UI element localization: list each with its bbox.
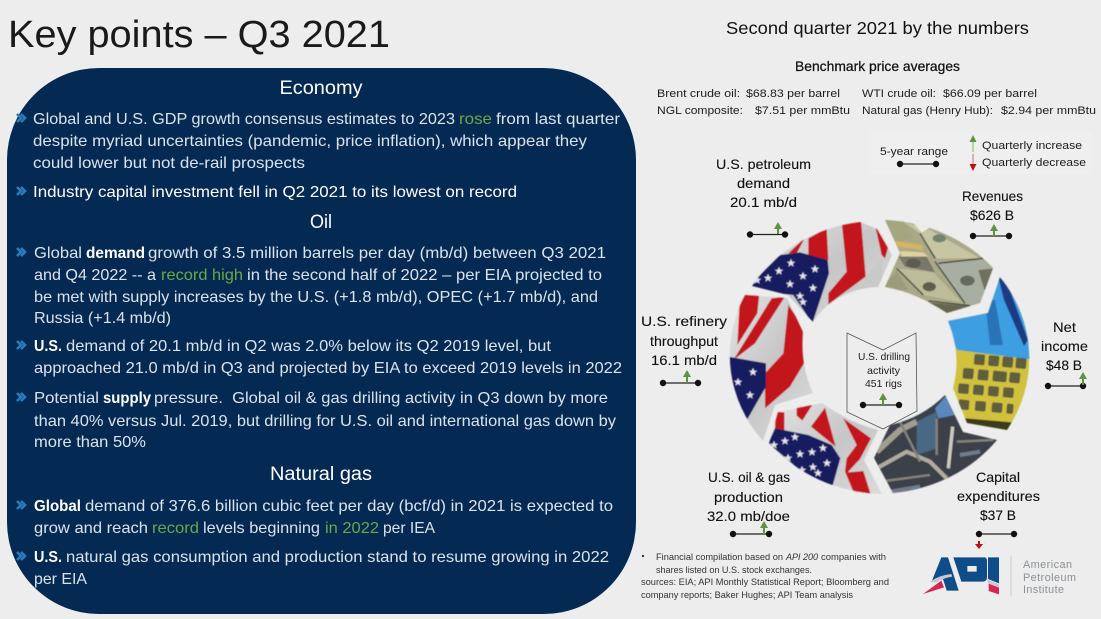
heading: benchmark prices: Benchmark price averages: [795, 59, 960, 74]
label: revenues: Revenues: [962, 189, 1023, 204]
bullet: global demand: Global: [34, 245, 82, 262]
bullet: U.S. natural gas: U.S.: [34, 549, 62, 566]
segment: calculator, net income: [948, 276, 1030, 431]
bullet: global demand: demand: [86, 245, 145, 262]
label: U.S. petroleum demand: demand: [737, 176, 790, 191]
API logo: Petroleum: [1023, 572, 1076, 584]
benchmark price list: $68.83 per barrel: [746, 88, 840, 100]
bullet: U.S. demand: approached 21.0 mb/d in Q3 and projected by EIA to exceed 2019 levels in 2022: [34, 360, 622, 377]
label: U.S. oil and gas production: U.S. oil & gas: [708, 470, 790, 485]
bullet: global gas demand: [17, 498, 613, 537]
benchmark price list: [657, 88, 1096, 117]
bullet: global demand: [17, 245, 606, 327]
heading: oil: Oil: [310, 212, 332, 233]
label: revenues: [962, 189, 1023, 239]
segment: money, revenues: [884, 219, 994, 314]
benchmark price list: NGL composite:: [657, 105, 743, 117]
bullet: GDP estimates: could lower but not de-rail prospects: [33, 155, 305, 172]
benchmark price list: WTI crude oil:: [862, 88, 936, 100]
label: U.S. refinery throughput: 16.1 mb/d: [651, 353, 717, 368]
heading: natural gas: Natural gas: [270, 464, 372, 485]
bullet: global gas demand: in 2022: [325, 520, 379, 537]
segment: refinery, capital expenditures: [874, 394, 998, 494]
center chevron: U.S. drilling activity: [847, 333, 917, 429]
bullet: supply pressure: pressure. Global oil & gas drilling activity in Q3 down by more: [154, 390, 608, 407]
label: U.S. refinery throughput: U.S. refinery: [641, 314, 727, 329]
bullet: global gas demand: per IEA: [383, 520, 435, 537]
center chevron: U.S. drilling activity: U.S. drilling: [858, 352, 910, 363]
legend: 5-year range: [880, 146, 948, 158]
bullet: supply pressure: than 40% versus Jul. 2019, but drilling for U.S. oil and international gas down by: [34, 413, 616, 430]
label: U.S. oil and gas production: production: [714, 490, 783, 505]
bullet: global gas demand: grow and reach: [34, 520, 148, 537]
bullet: U.S. demand: U.S.: [34, 338, 62, 355]
footnote and sources: shares listed on U.S. stock exchanges.: [656, 565, 812, 575]
segment: flag, oil and gas production: [768, 403, 882, 494]
label: U.S. refinery throughput: throughput: [650, 334, 718, 349]
legend: Quarterly increase: [982, 140, 1082, 152]
bullet: supply pressure: more than 50%: [34, 434, 146, 451]
segment: flag, petroleum demand: [752, 221, 892, 322]
bullet: global demand: Russia (+1.4 mb/d): [34, 310, 171, 327]
bullet: global demand: record high: [161, 267, 243, 284]
label: U.S. oil and gas production: [707, 470, 790, 537]
legend: [870, 132, 1092, 174]
segment: flag, refinery throughput: [729, 294, 813, 440]
label: capital expenditures: expenditures: [957, 489, 1040, 504]
footnote and sources: sources: EIA; API Monthly Statistical Report; Bloomberg and: [641, 577, 889, 587]
bullet: global demand: in the second half of 2022 – per EIA projected to: [247, 267, 602, 284]
bullet: GDP estimates: despite myriad uncertainties (pandemic, price inflation), which appear they: [33, 133, 587, 150]
benchmark price list: Brent crude oil:: [657, 88, 740, 100]
benchmark price list: $66.09 per barrel: [943, 88, 1037, 100]
label: capital expenditures: Capital: [976, 470, 1020, 485]
footnote and sources: Financial compilation based on: [656, 552, 783, 562]
bullet: U.S. demand: demand of 20.1 mb/d in Q2 was 2.0% below its Q2 2019 level, but: [66, 338, 552, 355]
benchmark price list: $7.51 per mmBtu: [755, 105, 850, 117]
label: net income: [1041, 320, 1088, 389]
footnote and sources: [641, 552, 889, 600]
title: Key points – Q3 2021: [8, 14, 390, 56]
API logo: [923, 556, 1076, 596]
label: net income: Net: [1053, 320, 1076, 335]
label: capital expenditures: $37 B: [980, 508, 1016, 523]
label: capital expenditures: [957, 470, 1040, 549]
label: U.S. oil and gas production: 32.0 mb/doe: [707, 509, 790, 524]
center chevron: U.S. drilling activity: activity: [867, 366, 901, 377]
API logo: Institute: [1023, 584, 1064, 596]
benchmark price list: $2.94 per mmBtu: [1001, 105, 1096, 117]
bullet: U.S. demand: [17, 338, 622, 377]
bullet: U.S. natural gas: [17, 549, 609, 588]
bullet: GDP estimates: Global and U.S. GDP growth consensus estimates to 2023: [33, 111, 455, 128]
bullet: GDP estimates: from last quarter: [496, 111, 620, 128]
label: U.S. petroleum demand: U.S. petroleum: [716, 157, 811, 172]
benchmark price list: Natural gas (Henry Hub):: [862, 105, 993, 117]
heading: economy: Economy: [280, 78, 363, 99]
bullet: global gas demand: Global: [34, 498, 81, 515]
bullet: U.S. natural gas: per EIA: [34, 571, 87, 588]
bullet: supply pressure: supply: [103, 390, 151, 407]
bullet: global gas demand: levels beginning: [203, 520, 320, 537]
bullet: GDP estimates: [17, 111, 620, 172]
bullet: global demand: and Q4 2022 -- a: [34, 267, 156, 284]
bullet: global demand: be met with supply increases by the U.S. (+1.8 mb/d), OPEC (+1.7 mb/d), and: [34, 289, 598, 306]
API logo: American: [1023, 559, 1072, 571]
bullet: GDP estimates: rose: [459, 111, 492, 128]
footnote and sources: companies with: [821, 552, 886, 562]
panel: key points: [7, 68, 636, 614]
bullet: global gas demand: demand of 376.6 billion cubic feet per day (bcf/d) in 2021 is expected to: [85, 498, 613, 515]
label: U.S. petroleum demand: [716, 157, 811, 238]
bullet: capital investment: Industry capital investment fell in Q2 2021 to its lowest on record: [33, 184, 517, 201]
label: U.S. refinery throughput: [641, 314, 727, 386]
footnote and sources: company reports; Baker Hughes; API Team analysis: [641, 590, 854, 600]
label: net income: $48 B: [1046, 358, 1082, 373]
bullet: supply pressure: [17, 390, 616, 451]
label: net income: income: [1041, 339, 1088, 354]
footnote and sources: API 200: [785, 552, 818, 562]
bullet: U.S. natural gas: natural gas consumption and production stand to resume growing in 2022: [66, 549, 609, 566]
legend: Quarterly decrease: [982, 157, 1086, 169]
bullet: supply pressure: Potential: [34, 390, 99, 407]
label: U.S. petroleum demand: 20.1 mb/d: [730, 195, 797, 210]
label: revenues: $626 B: [970, 208, 1014, 223]
center chevron: U.S. drilling activity: 451 rigs: [865, 379, 902, 390]
bullet: global gas demand: record: [152, 520, 199, 537]
heading: second quarter: Second quarter 2021 by the numbers: [726, 18, 1029, 38]
bullet: global demand: growth of 3.5 million barrels per day (mb/d) between Q3 2021: [148, 245, 606, 262]
ring of photo segments: [725, 215, 1035, 500]
